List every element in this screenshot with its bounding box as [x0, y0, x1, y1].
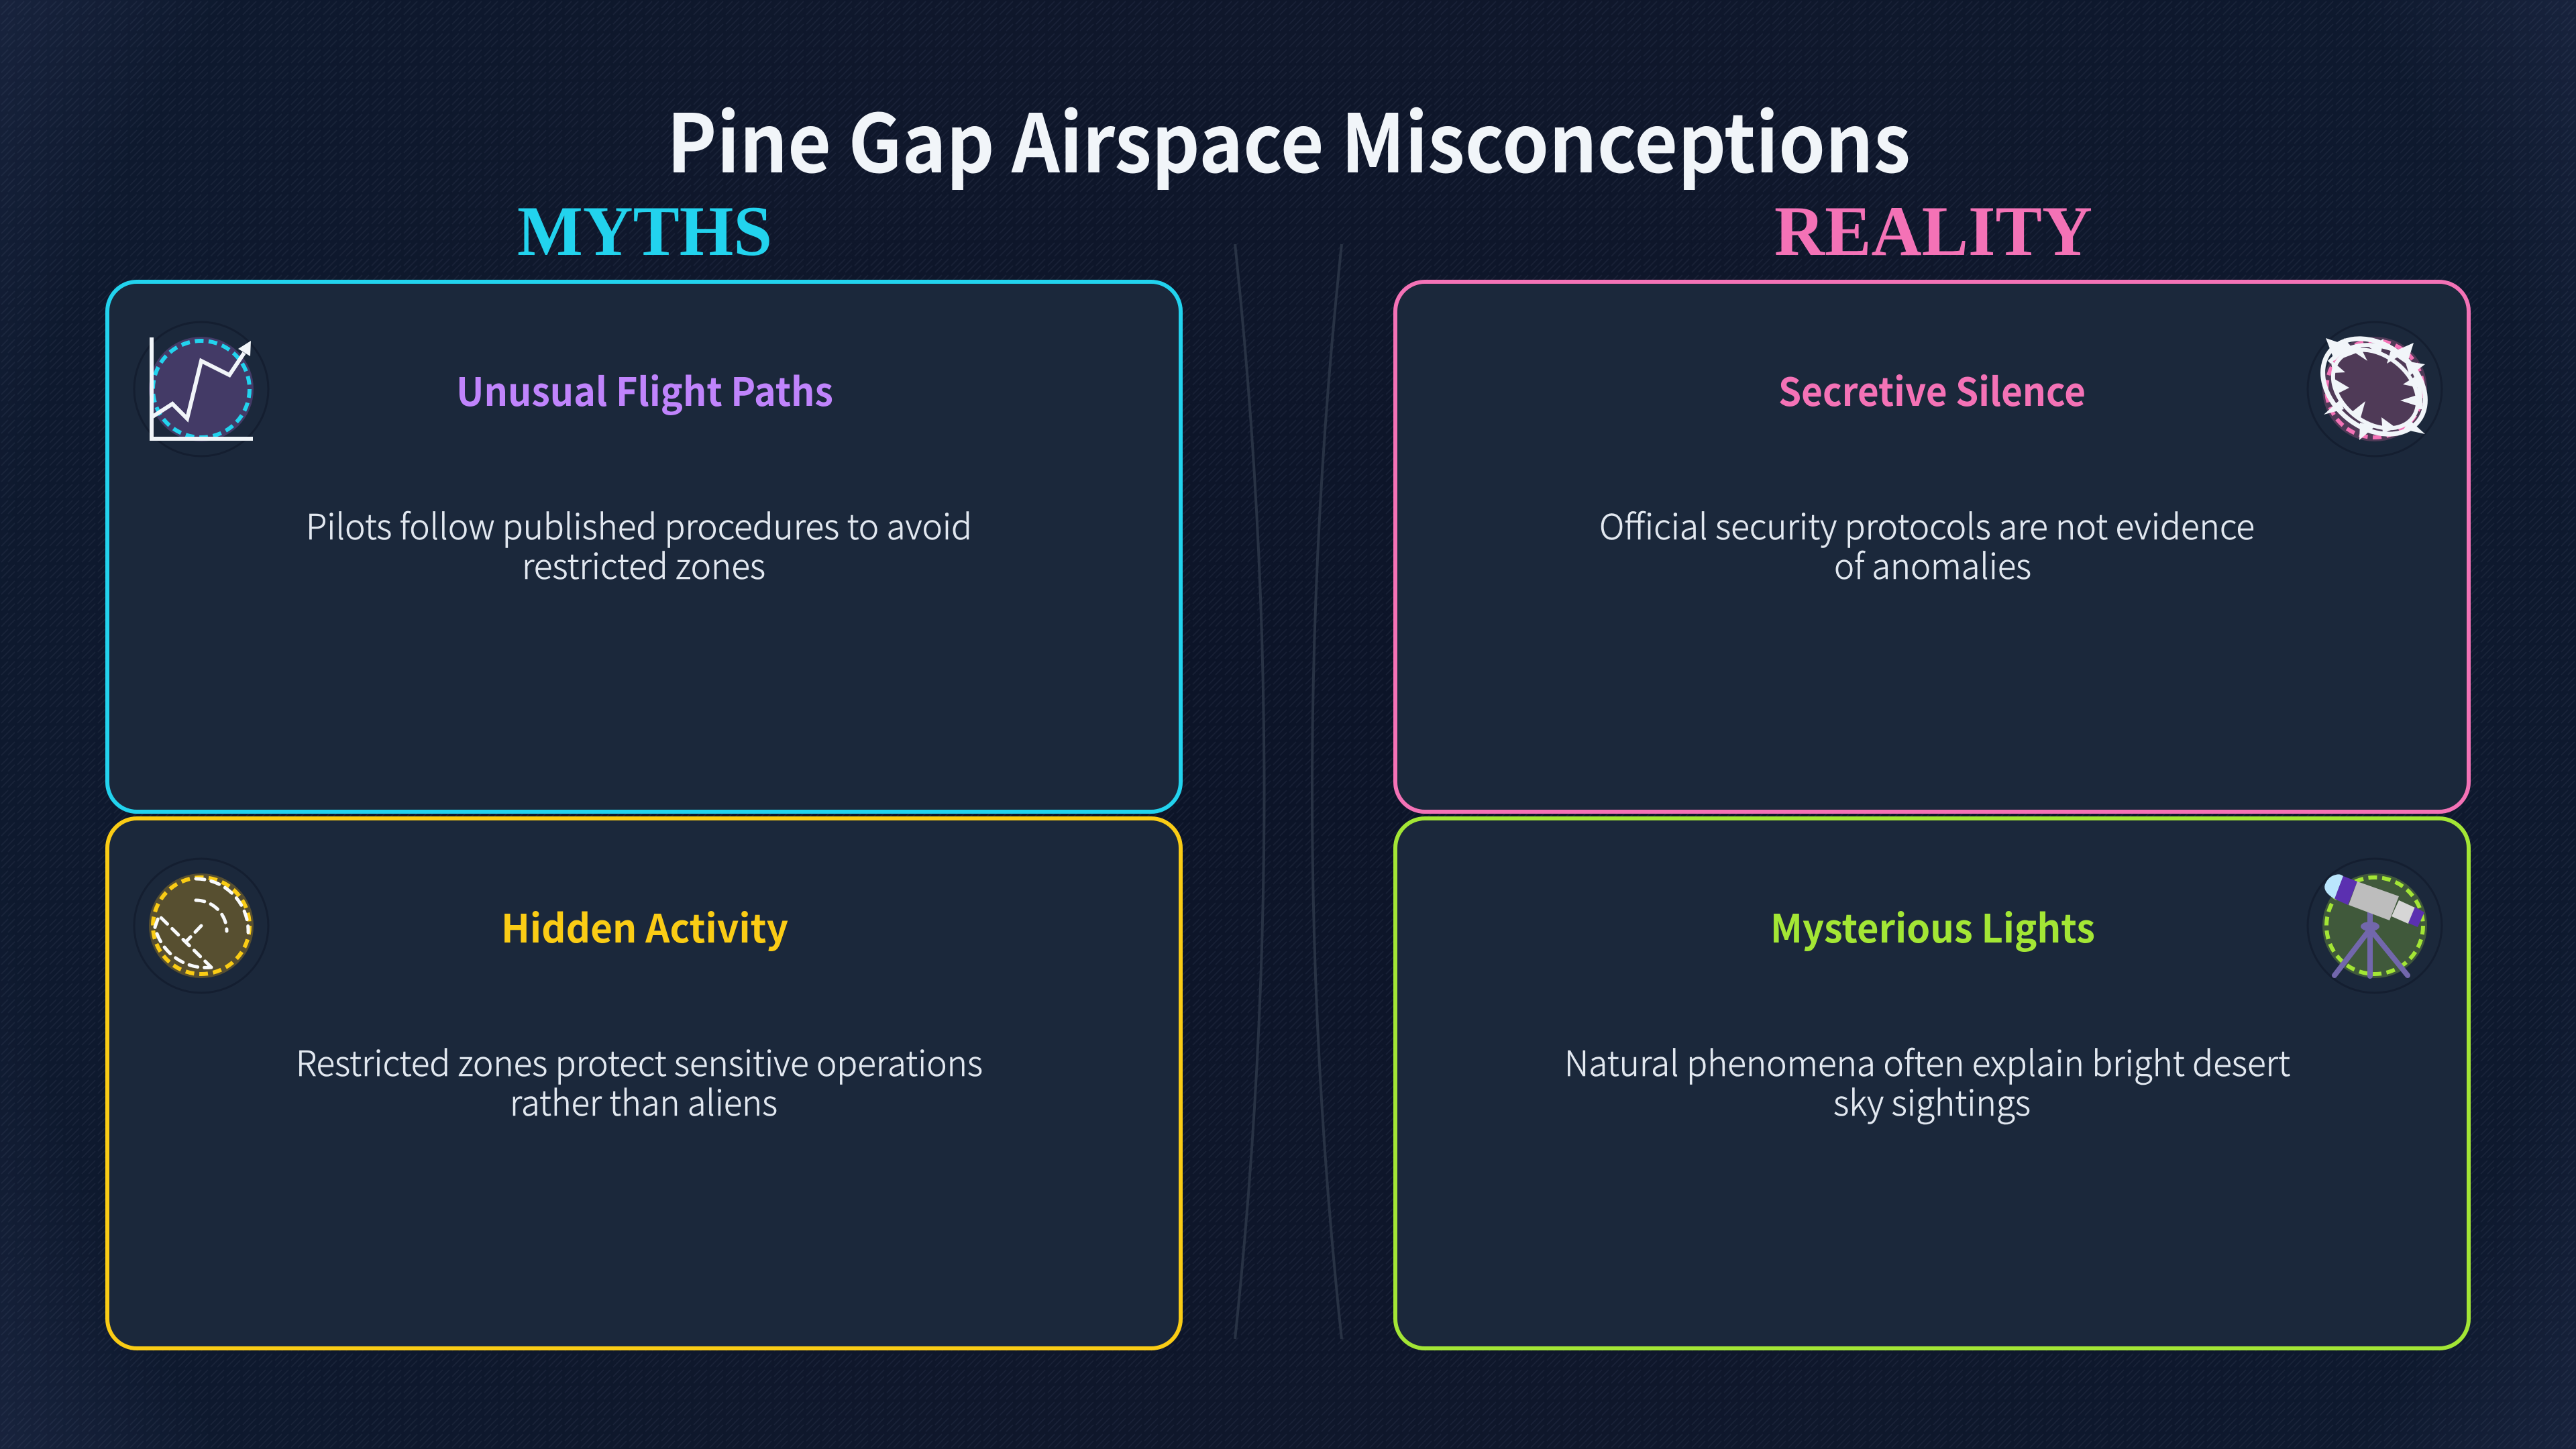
card body [1564, 1036, 2290, 1126]
card heading: Hidden Activity [501, 898, 788, 954]
card body [1599, 499, 2255, 589]
card body: sky sightings [1833, 1075, 2031, 1126]
card body: restricted zones [522, 539, 765, 589]
card body: Restricted zones protect sensitive operations [296, 1036, 983, 1086]
card heading: Secretive Silence [1778, 361, 2086, 417]
panel: unusual flight paths [107, 282, 1181, 812]
icon: crown of thorns [2304, 319, 2444, 456]
card body: rather than aliens [510, 1075, 777, 1126]
panel: secretive silence [1395, 282, 2469, 812]
icon: radar dish [134, 859, 268, 993]
panel: mysterious lights [1395, 818, 2469, 1348]
heading: myths: MYTHS [517, 192, 772, 270]
card heading: Mysterious Lights [1770, 898, 2095, 954]
icon: telescope [2308, 859, 2442, 993]
card body: of anomalies [1834, 539, 2031, 589]
heading: reality: REALITY [1774, 192, 2092, 270]
icon: line chart [134, 322, 268, 456]
card body [306, 499, 972, 589]
title: Pine Gap Airspace Misconceptions [667, 79, 1911, 196]
card body: Official security protocols are not evidence [1599, 499, 2255, 549]
card body [296, 1036, 983, 1126]
card body: Natural phenomena often explain bright desert [1564, 1036, 2290, 1086]
card heading: Unusual Flight Paths [456, 361, 833, 417]
card body: Pilots follow published procedures to avoid [306, 499, 972, 549]
panel: hidden activity [107, 818, 1181, 1348]
